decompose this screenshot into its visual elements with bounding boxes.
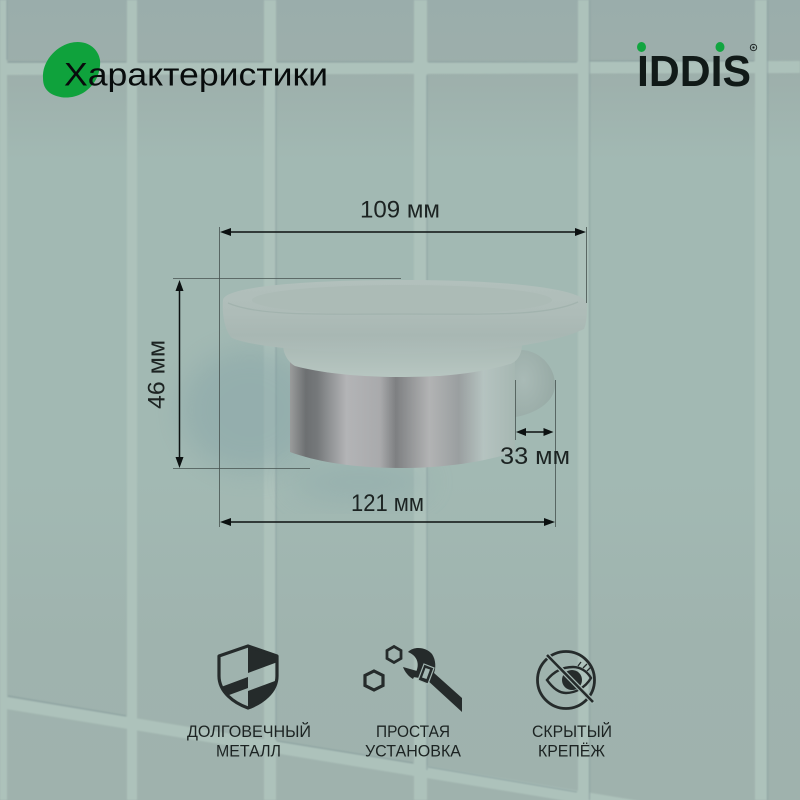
label: УСТАНОВКА [365,742,462,760]
feature: durable metal [187,646,311,760]
icon: crossed-out eye [538,652,594,708]
glass foot [283,344,522,377]
label [187,722,311,760]
label: ПРОСТАЯ [376,722,450,741]
metal holder cylinder [290,360,515,468]
dimension: 46 mm: 46 мм [144,340,170,409]
dimension: 121 mm [220,490,555,526]
logo: IDDIS: IDDIS [637,47,751,96]
icon: green blob [43,42,100,98]
dimension: 46 mm [144,280,184,468]
heading: green blob and title [43,42,328,98]
label: МЕТАЛЛ [216,742,281,760]
dimension: 33 mm: 33 мм [500,443,570,470]
icon: shield [219,646,277,720]
dimension: 109 mm [220,196,586,236]
wall mount [510,350,555,417]
dimension: 121 mm: 121 мм [351,490,424,517]
label: СКРЫТЫЙ [532,722,612,741]
label: КРЕПЁЖ [538,742,605,760]
icon: nuts and wrench [365,646,462,712]
product: soap dish [223,280,587,468]
dimension: 33 mm [500,428,570,470]
dimension: extension lines [173,227,586,527]
label [365,722,462,760]
title: Характеристики [64,56,328,92]
label [532,722,612,760]
feature: easy installation [365,646,462,760]
label: ДОЛГОВЕЧНЫЙ [187,722,311,741]
feature: hidden mount [532,652,612,760]
glass dish [223,280,587,354]
dimension: 109 mm: 109 мм [360,196,440,224]
